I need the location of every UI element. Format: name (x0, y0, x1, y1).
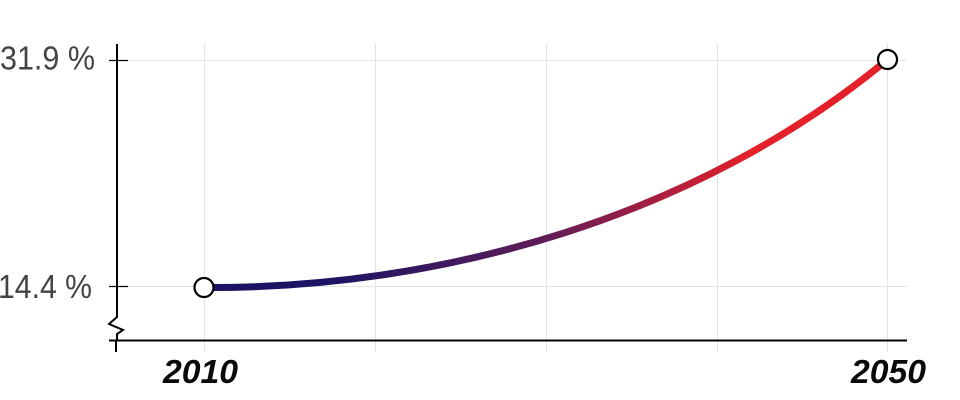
x axis (109, 340, 907, 352)
y label: 31.9 %: 31.9 % (0, 40, 95, 76)
x label: 2010: 2010 (162, 353, 239, 390)
x label: 2050: 2050 (850, 353, 927, 390)
marker: 2050 (878, 50, 897, 69)
marker: 2010 (194, 278, 214, 297)
curve: gradient line from 14.4% to 31.9% (204, 60, 887, 288)
y axis (109, 44, 128, 340)
y label: 14.4 %: 14.4 % (0, 268, 92, 305)
